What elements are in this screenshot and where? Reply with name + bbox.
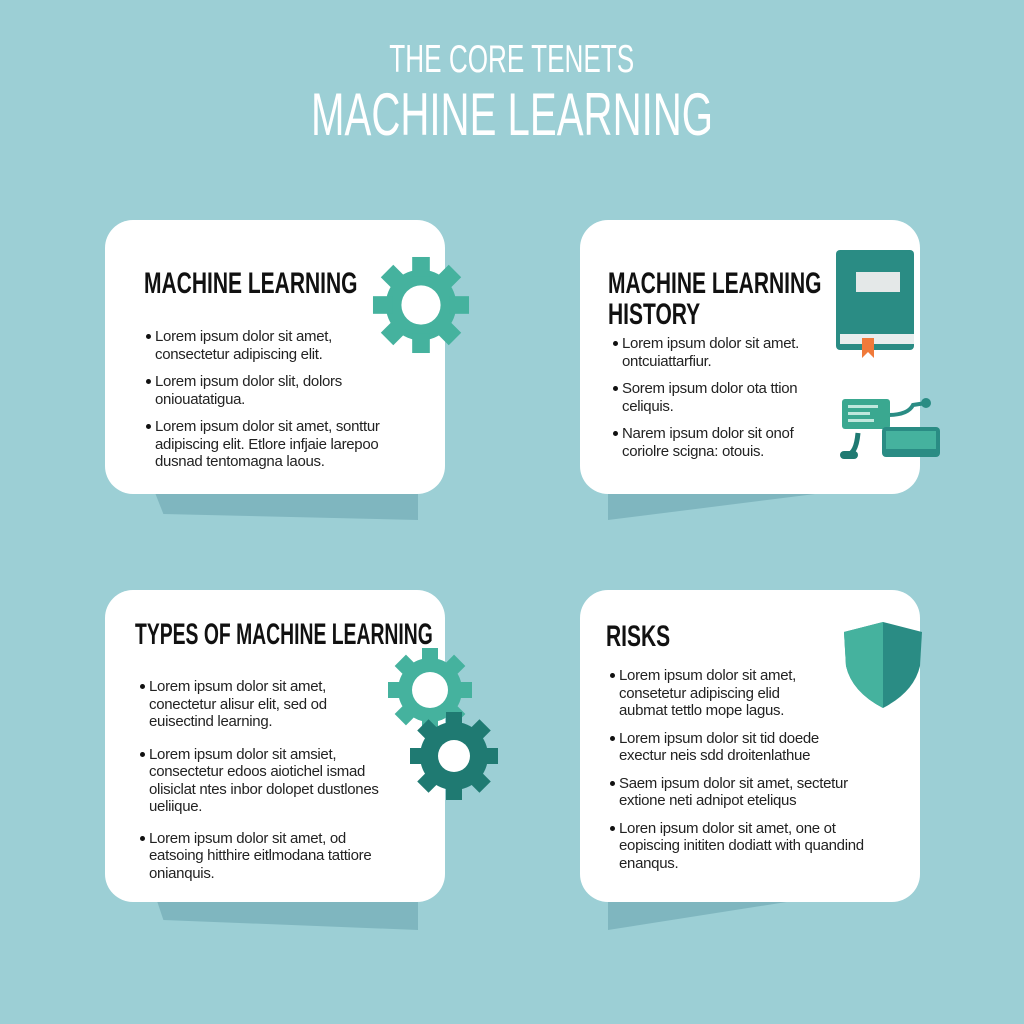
heading: TYPES OF MACHINE LEARNING xyxy=(135,618,433,651)
bullets: Lorem ipsum dolor sit tid doede xyxy=(619,730,819,746)
bullets: adipiscing elit. Etlore infjaie larepoo xyxy=(155,436,378,452)
bullets: consectetur adipiscing elit. xyxy=(155,346,323,362)
bullets: onianquis. xyxy=(149,864,214,882)
bullets: Lorem ipsum dolor sit amet. xyxy=(622,335,799,352)
bullets: eatsoing hitthire eitlmodana tattiore xyxy=(149,847,371,864)
bullets: Lorem ipsum dolor sit amet, xyxy=(155,328,332,345)
bullets: Lorem ipsum dolor sit amet, xyxy=(149,678,326,695)
heading: MACHINE LEARNING xyxy=(144,267,358,300)
title: MACHINE LEARNING xyxy=(311,81,713,148)
bullets: Lorem ipsum dolor sit amet, sonttur xyxy=(155,418,380,435)
bullets: Narem ipsum dolor sit onof xyxy=(622,425,793,442)
icon: gears xyxy=(388,648,498,800)
icon: gear xyxy=(373,257,469,353)
bullets: consetetur adipiscing elid xyxy=(619,684,780,702)
bullets: conectetur alisur elit, sed od xyxy=(149,696,327,712)
bullets xyxy=(613,335,799,460)
heading xyxy=(608,267,822,331)
bullets: enanqus. xyxy=(619,854,678,872)
bullets: Lorem ipsum dolor sit amet, od xyxy=(149,830,346,846)
bullets: Sorem ipsum dolor ota ttion xyxy=(622,380,797,397)
shadows xyxy=(156,494,418,520)
bullets: Saem ipsum dolor sit amet, sectetur xyxy=(619,774,848,792)
heading: HISTORY xyxy=(608,298,700,331)
panel: types xyxy=(105,590,445,902)
bullets: aubmat tettlo mope lagus. xyxy=(619,702,784,719)
bullets: Loren ipsum dolor sit amet, one ot xyxy=(619,820,836,836)
panel: risks xyxy=(580,590,920,902)
bullets: eopiscing inititen dodiatt with quandind xyxy=(619,837,864,854)
bullets: Lorem ipsum dolor slit, dolors xyxy=(155,373,342,390)
bullets: euisectind learning. xyxy=(149,713,272,730)
bullets: celiquis. xyxy=(622,398,674,414)
bullets: consectetur edoos aiotichel ismad xyxy=(149,763,365,780)
panel: machine learning xyxy=(105,220,445,494)
bullets: coriolre scigna: otouis. xyxy=(622,442,764,460)
bullets xyxy=(610,667,864,872)
heading: RISKS xyxy=(606,620,670,653)
title: THE CORE TENETS xyxy=(390,38,634,81)
bullets: ontcuiattarfiur. xyxy=(622,352,711,370)
bullets: extione neti adnipot eteliqus xyxy=(619,792,796,809)
panel: history xyxy=(580,220,920,494)
icon: book xyxy=(836,250,914,358)
bullets: Lorem ipsum dolor sit amsiet, xyxy=(149,746,336,762)
bullets: Lorem ipsum dolor sit amet, xyxy=(619,667,796,684)
icon: flowchart xyxy=(840,398,940,459)
bullets: ueliique. xyxy=(149,798,202,815)
heading: MACHINE LEARNING xyxy=(608,267,822,300)
bullets: oniouatatigua. xyxy=(155,390,245,408)
bullets: dusnad tentomagna laous. xyxy=(155,453,325,470)
icon: shield xyxy=(844,622,922,708)
bullets: olisiclat ntes inbor dolopet dustlones xyxy=(149,780,379,798)
title xyxy=(311,38,713,148)
bullets xyxy=(146,328,380,470)
bullets xyxy=(140,678,379,882)
bullets: exectur neis sdd droitenlathue xyxy=(619,747,810,764)
